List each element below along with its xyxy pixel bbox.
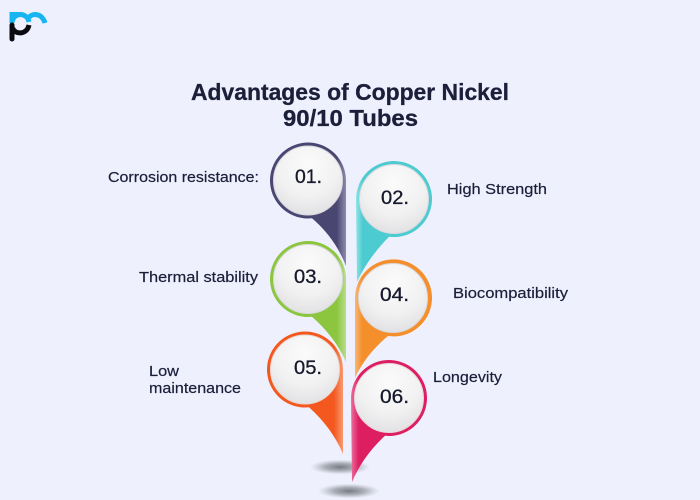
label: corrosion resistance: Corrosion resistance: [108,170,259,186]
pin 01 [270,143,346,266]
label: thermal stability: Thermal stability [139,270,259,286]
pin 03 [270,241,346,362]
title: Advantages of Copper Nickel [191,79,509,105]
label: low maintenance: Low [149,364,180,380]
pin 06: 06. [380,387,409,408]
pin 04: 04. [380,285,409,306]
shadow: pin 06 [318,484,380,498]
pin 05 [267,332,343,454]
label: low maintenance: maintenance [149,381,241,397]
pin 04 [355,259,432,378]
title: 90/10 Tubes [283,105,418,131]
pin 03: 03. [294,267,322,288]
pin 06 [351,360,427,482]
title [191,79,509,131]
label: low maintenance [149,364,241,397]
pin 05: 05. [294,358,322,379]
label: longevity: Longevity [433,370,503,386]
pin 02 [356,161,432,282]
logo [12,14,45,39]
pin 01: 01. [295,167,322,188]
shadow: pin 05 [310,460,370,474]
label: high strength: High Strength [447,182,547,198]
pin 02: 02. [381,188,409,209]
label: biocompatibility: Biocompatibility [453,286,569,302]
